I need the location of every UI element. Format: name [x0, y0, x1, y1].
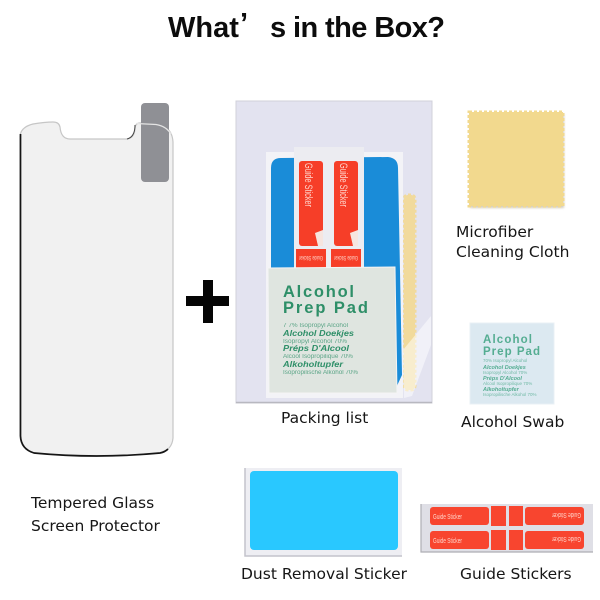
- alcohol swab: 70% Isopropyl Alcohol: [483, 358, 527, 363]
- title: ’: [240, 8, 248, 40]
- guide sticker strip in bag: Guide Sticker: [302, 163, 314, 207]
- cloth in bag: [404, 195, 415, 390]
- alcohol prep pad: Préps D'Alcool: [283, 343, 350, 353]
- guide stickers: Guide Sticker: [433, 536, 462, 545]
- alcohol prep pad: Alcohol: [283, 283, 354, 301]
- title: s in the Box?: [270, 12, 445, 44]
- alcohol prep pad: Prep Pad: [283, 299, 368, 317]
- packing list bag: [236, 101, 432, 403]
- alcohol prep pad: Alcool Isopropilique 70%: [283, 354, 354, 360]
- alcohol swab: Isopropilische Alkohol 70%: [483, 392, 537, 397]
- glass panel: [20, 122, 173, 456]
- guide stickers: Guide Sticker: [433, 512, 462, 521]
- guide stickers: Guide Sticker: [552, 535, 581, 544]
- guide sticker strip in bag: Guide Sticker: [337, 163, 349, 207]
- label: dust removal sticker: Dust Removal Sticker: [241, 565, 408, 583]
- guide stickers: [421, 504, 593, 552]
- alcohol swab: Alkoholtupfer: [482, 387, 520, 393]
- alcohol swab: [470, 323, 554, 404]
- alcohol prep pad: [268, 267, 397, 393]
- microfiber cloth: [469, 112, 564, 208]
- label: guide stickers: Guide Stickers: [460, 565, 572, 583]
- title: [168, 8, 445, 44]
- alcohol swab: Prep Pad: [483, 346, 540, 358]
- alcohol swab: Alcohol Doekjes: [482, 365, 526, 371]
- plus sign: [186, 280, 229, 323]
- label: microfiber cleaning cloth: Microfiber: [456, 223, 534, 241]
- alcohol prep pad: Isopropilische Alkohol 70%: [283, 370, 359, 376]
- alcohol swab: Isopropyl Alcohol 70%: [483, 370, 527, 375]
- label: alcohol swab: Alcohol Swab: [461, 413, 564, 431]
- guide sticker strip in bag: [294, 147, 364, 272]
- guide sticker strip in bag: Guide Sticker: [334, 254, 358, 260]
- alcohol swab: Alcohol: [483, 334, 532, 346]
- alcohol swab: Alcool Isopropilique 70%: [483, 381, 532, 386]
- alcohol prep pad: Alcohol Doekjes: [282, 328, 354, 338]
- plastic bag: [236, 101, 432, 403]
- guide sticker strip in bag: Guide Sticker: [299, 254, 323, 260]
- label: packing list: Packing list: [281, 409, 368, 427]
- pull tab: [141, 103, 169, 182]
- screen protector with tab: [20, 103, 173, 456]
- alcohol prep pad: 7 7% Isopropyl Alcohol: [283, 323, 348, 329]
- bag glare: [403, 316, 431, 398]
- alcohol swab: Préps D'Alcool: [483, 376, 522, 382]
- dust sticker in bag: [266, 152, 403, 398]
- label: microfiber cleaning cloth: Cleaning Cloth: [456, 243, 569, 261]
- title: What: [168, 12, 239, 44]
- guide stickers: Guide Sticker: [552, 511, 581, 520]
- alcohol prep pad: Alkoholtupfer: [282, 359, 344, 369]
- alcohol prep pad: Isopropyl Alcohol 70%: [283, 339, 348, 345]
- dust removal sticker: [245, 468, 402, 556]
- label: tempered glass screen protector: Screen Protector: [31, 517, 161, 535]
- label: tempered glass screen protector: Tempered Glass: [30, 494, 154, 512]
